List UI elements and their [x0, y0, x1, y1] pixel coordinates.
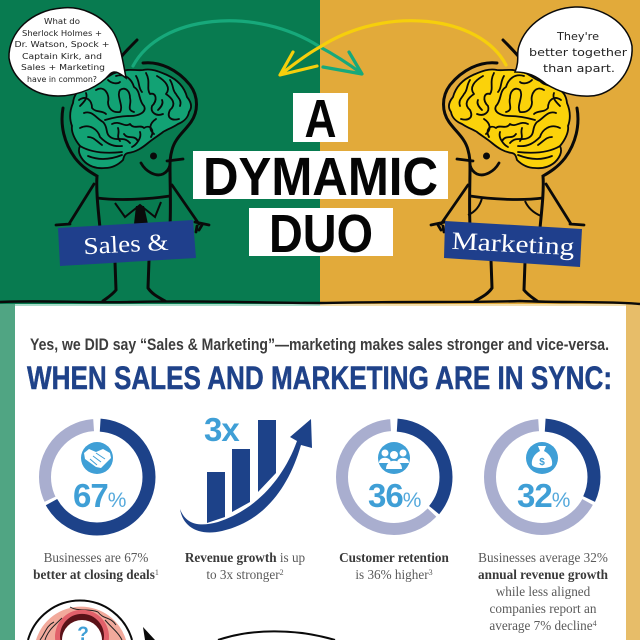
label: Sales &: Sales &: [83, 230, 169, 260]
stat: 3x revenue growth: [180, 411, 312, 582]
stat: 67 percent closing deals: [33, 425, 159, 582]
arrow tip: pointer to speech bubble: [143, 627, 155, 640]
background: marketing gold half: [320, 0, 640, 304]
background: sales green half: [0, 0, 320, 304]
content panel: [15, 304, 626, 640]
title: [193, 89, 448, 264]
speech bubble: question: Sherlock Holmes +: [22, 29, 102, 38]
stat: 67 percent closing deals: 1: [155, 568, 159, 577]
title: DUO: [269, 204, 373, 264]
green arc arrow: [133, 21, 362, 74]
stat: 32 percent revenue growth: 4: [593, 619, 597, 628]
stat: 3x revenue growth: Revenue growth is up: [185, 550, 306, 565]
stat: 32 percent revenue growth: while less aligned: [496, 584, 591, 599]
illustration: brain with question mark: [28, 601, 132, 640]
speech bubble: answer: They're: [556, 31, 599, 43]
figure: marketing with yellow brain: [431, 40, 584, 301]
speech bubble: answer: [515, 7, 632, 96]
label: Marketing: Marketing: [451, 228, 576, 261]
icon: people: [378, 442, 410, 474]
stat: 3x revenue growth: to 3x stronger: [206, 567, 280, 582]
speech bubble: question: Sales + Marketing: [21, 63, 105, 72]
stat: 67 percent closing deals: 67%: [73, 477, 126, 514]
stat: 3x revenue growth: 2: [280, 568, 284, 577]
stat: 36 percent customer retention: [339, 425, 450, 582]
speech bubble: answer: better together: [529, 47, 628, 59]
stat: 32 percent revenue growth: average 7% decline: [489, 618, 593, 633]
speech bubble: question: Dr. Watson, Spock +: [14, 40, 110, 49]
icon: money bag: $: [539, 457, 545, 468]
arrow: growth swoosh: [180, 419, 312, 532]
ground line: [0, 301, 640, 304]
icon: money bag: [526, 442, 558, 474]
stat: 32 percent revenue growth: [478, 425, 609, 633]
figure: sales with green brain: [56, 40, 209, 301]
speech bubble: question: [9, 8, 126, 96]
right side band: [626, 304, 640, 640]
stat: 36 percent customer retention: 36%: [368, 477, 421, 514]
left side band: [0, 304, 15, 640]
title: A: [304, 89, 336, 149]
stat: 32 percent revenue growth: annual revenue growth: [478, 567, 609, 582]
stat: 67 percent closing deals: better at closing deals: [33, 567, 155, 582]
speech bubble: question: What do: [44, 17, 80, 26]
yellow arc arrow: [280, 21, 506, 75]
stat: 32 percent revenue growth: Businesses average 32%: [478, 550, 608, 565]
stat: 36 percent customer retention: is 36% higher: [355, 567, 429, 582]
speech bubble top edge: [218, 631, 335, 640]
speech bubble: question: have in common?: [27, 75, 97, 84]
stat: 36 percent customer retention: 3: [429, 568, 433, 577]
bar chart: [207, 420, 276, 523]
label: Marketing: [444, 221, 582, 267]
stat: 67 percent closing deals: Businesses are 67%: [44, 550, 148, 565]
label: Sales &: [58, 220, 196, 266]
speech bubble: question: Captain Kirk, and: [22, 52, 102, 61]
stat: 36 percent customer retention: Customer retention: [339, 550, 450, 565]
stat: 32 percent revenue growth: companies report an: [490, 601, 597, 616]
title: DYMAMIC: [203, 147, 438, 207]
speech bubble: answer: than apart.: [543, 63, 615, 75]
icon: handshake: [81, 442, 113, 474]
stat: 32 percent revenue growth: 32%: [517, 477, 570, 514]
stat: 3x revenue growth: 3x: [204, 411, 240, 448]
